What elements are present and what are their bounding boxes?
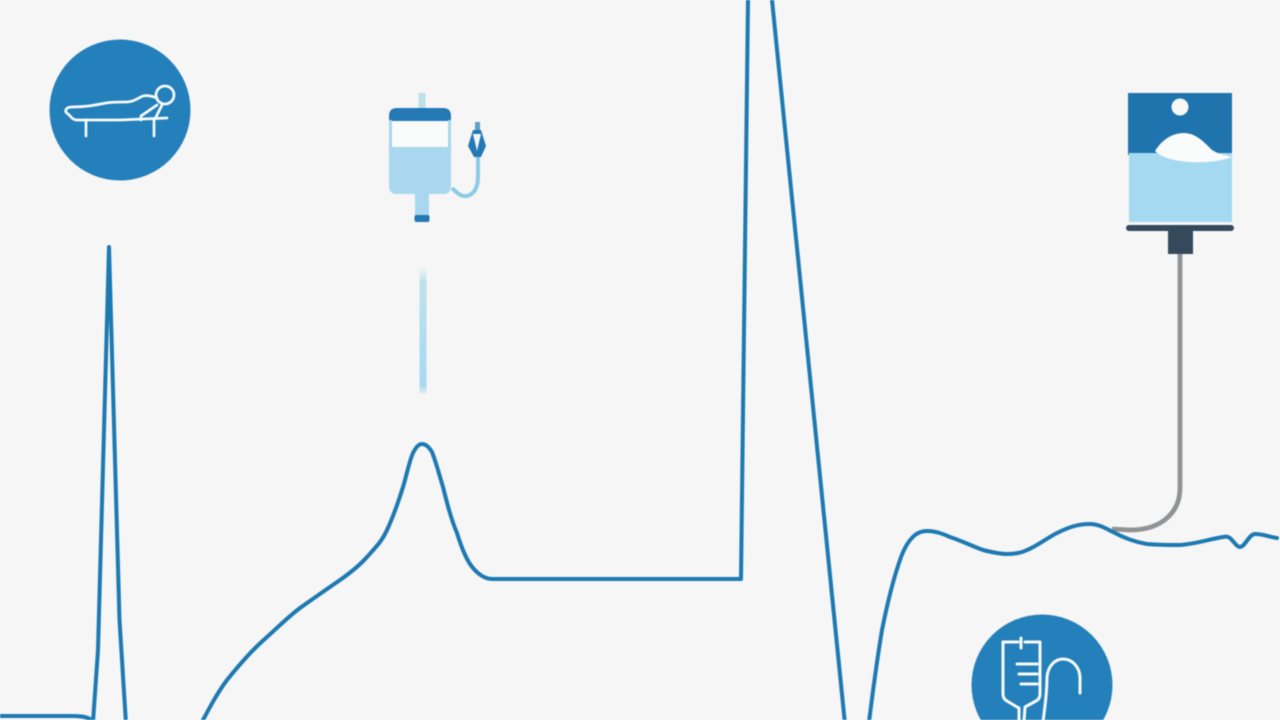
- IV line: grey tube joining the trace: [1112, 254, 1180, 530]
- icon: fluid reservoir panel on stand: [1126, 93, 1234, 254]
- falling fluid stream: [420, 268, 426, 394]
- trace segment: recovery and baseline: [869, 524, 1277, 720]
- trace segment: first spike: [0, 247, 126, 720]
- icon: patient lying on a bed: [50, 40, 190, 180]
- trace segment: rounded wave and tall spike: [203, 0, 845, 720]
- icon: IV fluid bag: [389, 93, 486, 222]
- icon: IV drip in circle: [972, 614, 1112, 720]
